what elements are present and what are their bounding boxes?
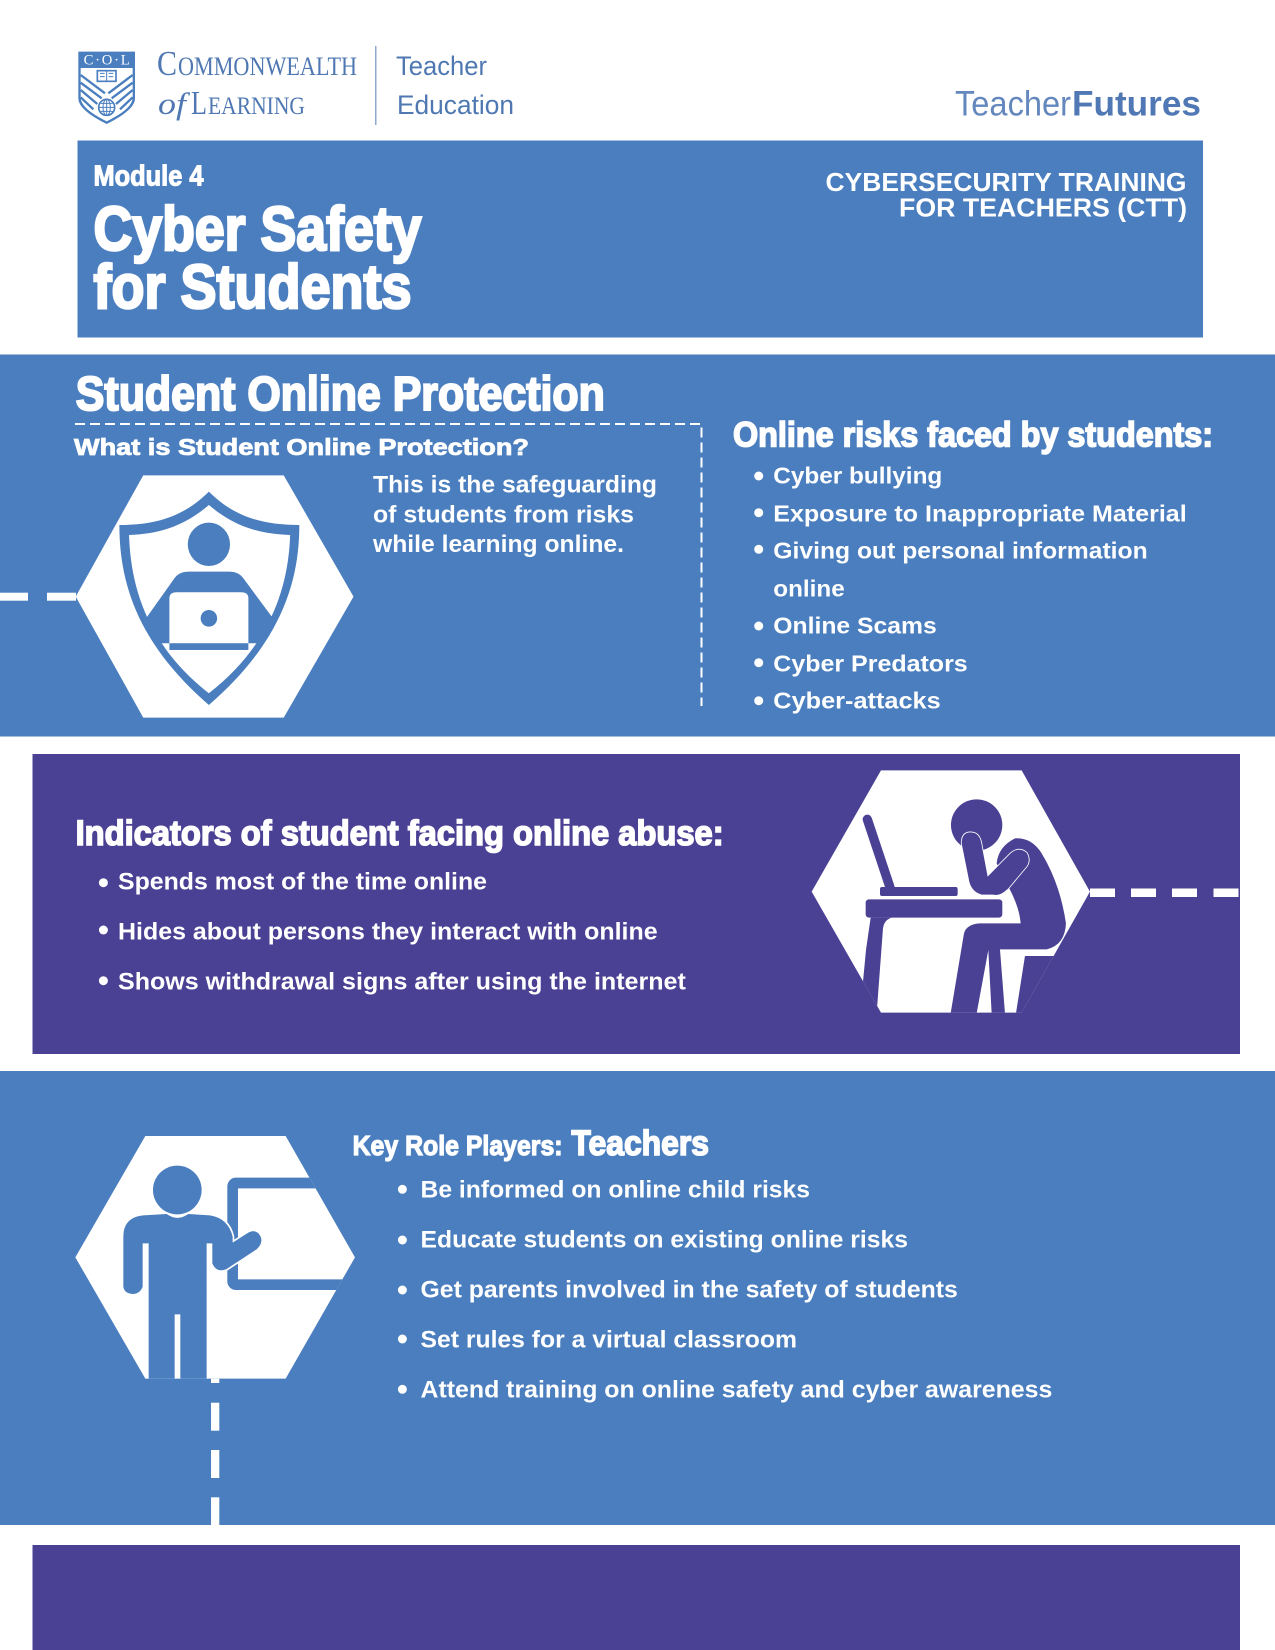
list: online risks: online xyxy=(773,576,845,602)
text: definition: while learning online. xyxy=(372,531,624,558)
logo: Teacher Education: Teacher xyxy=(396,51,487,81)
connector: dashed arrow left xyxy=(0,593,76,601)
list: online risks: Cyber-attacks xyxy=(773,687,941,713)
list: teacher actions: Educate students on existing online risks xyxy=(420,1226,908,1253)
text: definition: This is the safeguarding xyxy=(373,472,657,499)
subheading: what is student online protection: What is Student Online Protection? xyxy=(74,434,529,460)
logo wordmark: OMMONWEALTH xyxy=(178,52,357,81)
logo wordmark: of xyxy=(158,86,191,121)
logo wordmark: L xyxy=(191,85,207,122)
icon: hexagon with teacher at board xyxy=(75,1136,355,1379)
list: online risks: Cyber bullying xyxy=(773,462,942,488)
panel: bottom purple band xyxy=(32,1545,1240,1650)
logo: Teacher Education xyxy=(396,51,514,120)
list: online risks: Online Scams xyxy=(773,612,937,638)
list: indicators: Shows withdrawal signs after using the internet xyxy=(118,968,686,995)
logo: TeacherFutures: Futures xyxy=(1072,84,1201,124)
heading: online risks: Online risks faced by students: xyxy=(733,416,1213,455)
heading: student online protection: Student Online Protection xyxy=(76,368,605,421)
logo wordmark xyxy=(157,44,357,122)
panel: indicators of online abuse xyxy=(32,754,1240,1054)
list: indicators: Hides about persons they interact with online xyxy=(118,918,658,945)
list: online risks xyxy=(754,462,1187,713)
text: programme name xyxy=(826,167,1187,223)
logo: TeacherFutures xyxy=(955,84,1201,124)
list: online risks: Cyber Predators xyxy=(773,651,968,677)
list: online risks: Exposure to Inappropriate Material xyxy=(773,501,1187,527)
icon: COL crest: C·O·L xyxy=(84,53,130,69)
panel: student online protection xyxy=(0,354,1275,736)
list: indicators xyxy=(99,868,686,995)
text: programme name: CYBERSECURITY TRAINING xyxy=(826,167,1186,197)
panel: title banner xyxy=(78,140,1203,338)
panel: key role players teachers xyxy=(0,1071,1275,1525)
icon: COL crest xyxy=(78,52,135,124)
list: indicators: Spends most of the time online xyxy=(118,868,487,895)
header logo: Commonwealth of Learning xyxy=(78,44,514,125)
list: teacher actions: Attend training on online safety and cyber awareness xyxy=(420,1376,1052,1403)
text: programme name: FOR TEACHERS (CTT) xyxy=(899,193,1187,223)
logo wordmark: C xyxy=(157,44,177,83)
list: teacher actions: Get parents involved in the safety of students xyxy=(420,1276,958,1303)
heading: key role players xyxy=(353,1124,709,1163)
icon: hexagon with distressed student at desk xyxy=(812,770,1090,1013)
list: online risks: Giving out personal information xyxy=(773,537,1148,563)
logo wordmark: EARNING xyxy=(208,93,305,120)
heading: key role players: Key Role Players: xyxy=(353,1130,563,1161)
title xyxy=(94,195,422,322)
text: definition: of students from risks xyxy=(373,502,634,529)
connector: dashed arrow down xyxy=(211,1379,219,1525)
icon: hexagon with shield and student at laptop xyxy=(76,475,354,718)
heading: indicators: Indicators of student facing online abuse: xyxy=(76,814,724,853)
heading: key role players: Teachers xyxy=(571,1124,709,1163)
list: teacher actions xyxy=(398,1176,1052,1403)
title: for Students xyxy=(94,253,412,322)
list: teacher actions: Set rules for a virtual classroom xyxy=(420,1326,797,1353)
text: definition xyxy=(372,472,657,558)
logo: Teacher Education: Education xyxy=(397,90,514,120)
list: teacher actions: Be informed on online child risks xyxy=(420,1176,810,1203)
logo: TeacherFutures: Teacher xyxy=(955,84,1071,124)
text: module label: Module 4 xyxy=(94,161,204,193)
title: Cyber Safety xyxy=(94,195,422,264)
connector: dashed arrow right xyxy=(1090,888,1238,897)
